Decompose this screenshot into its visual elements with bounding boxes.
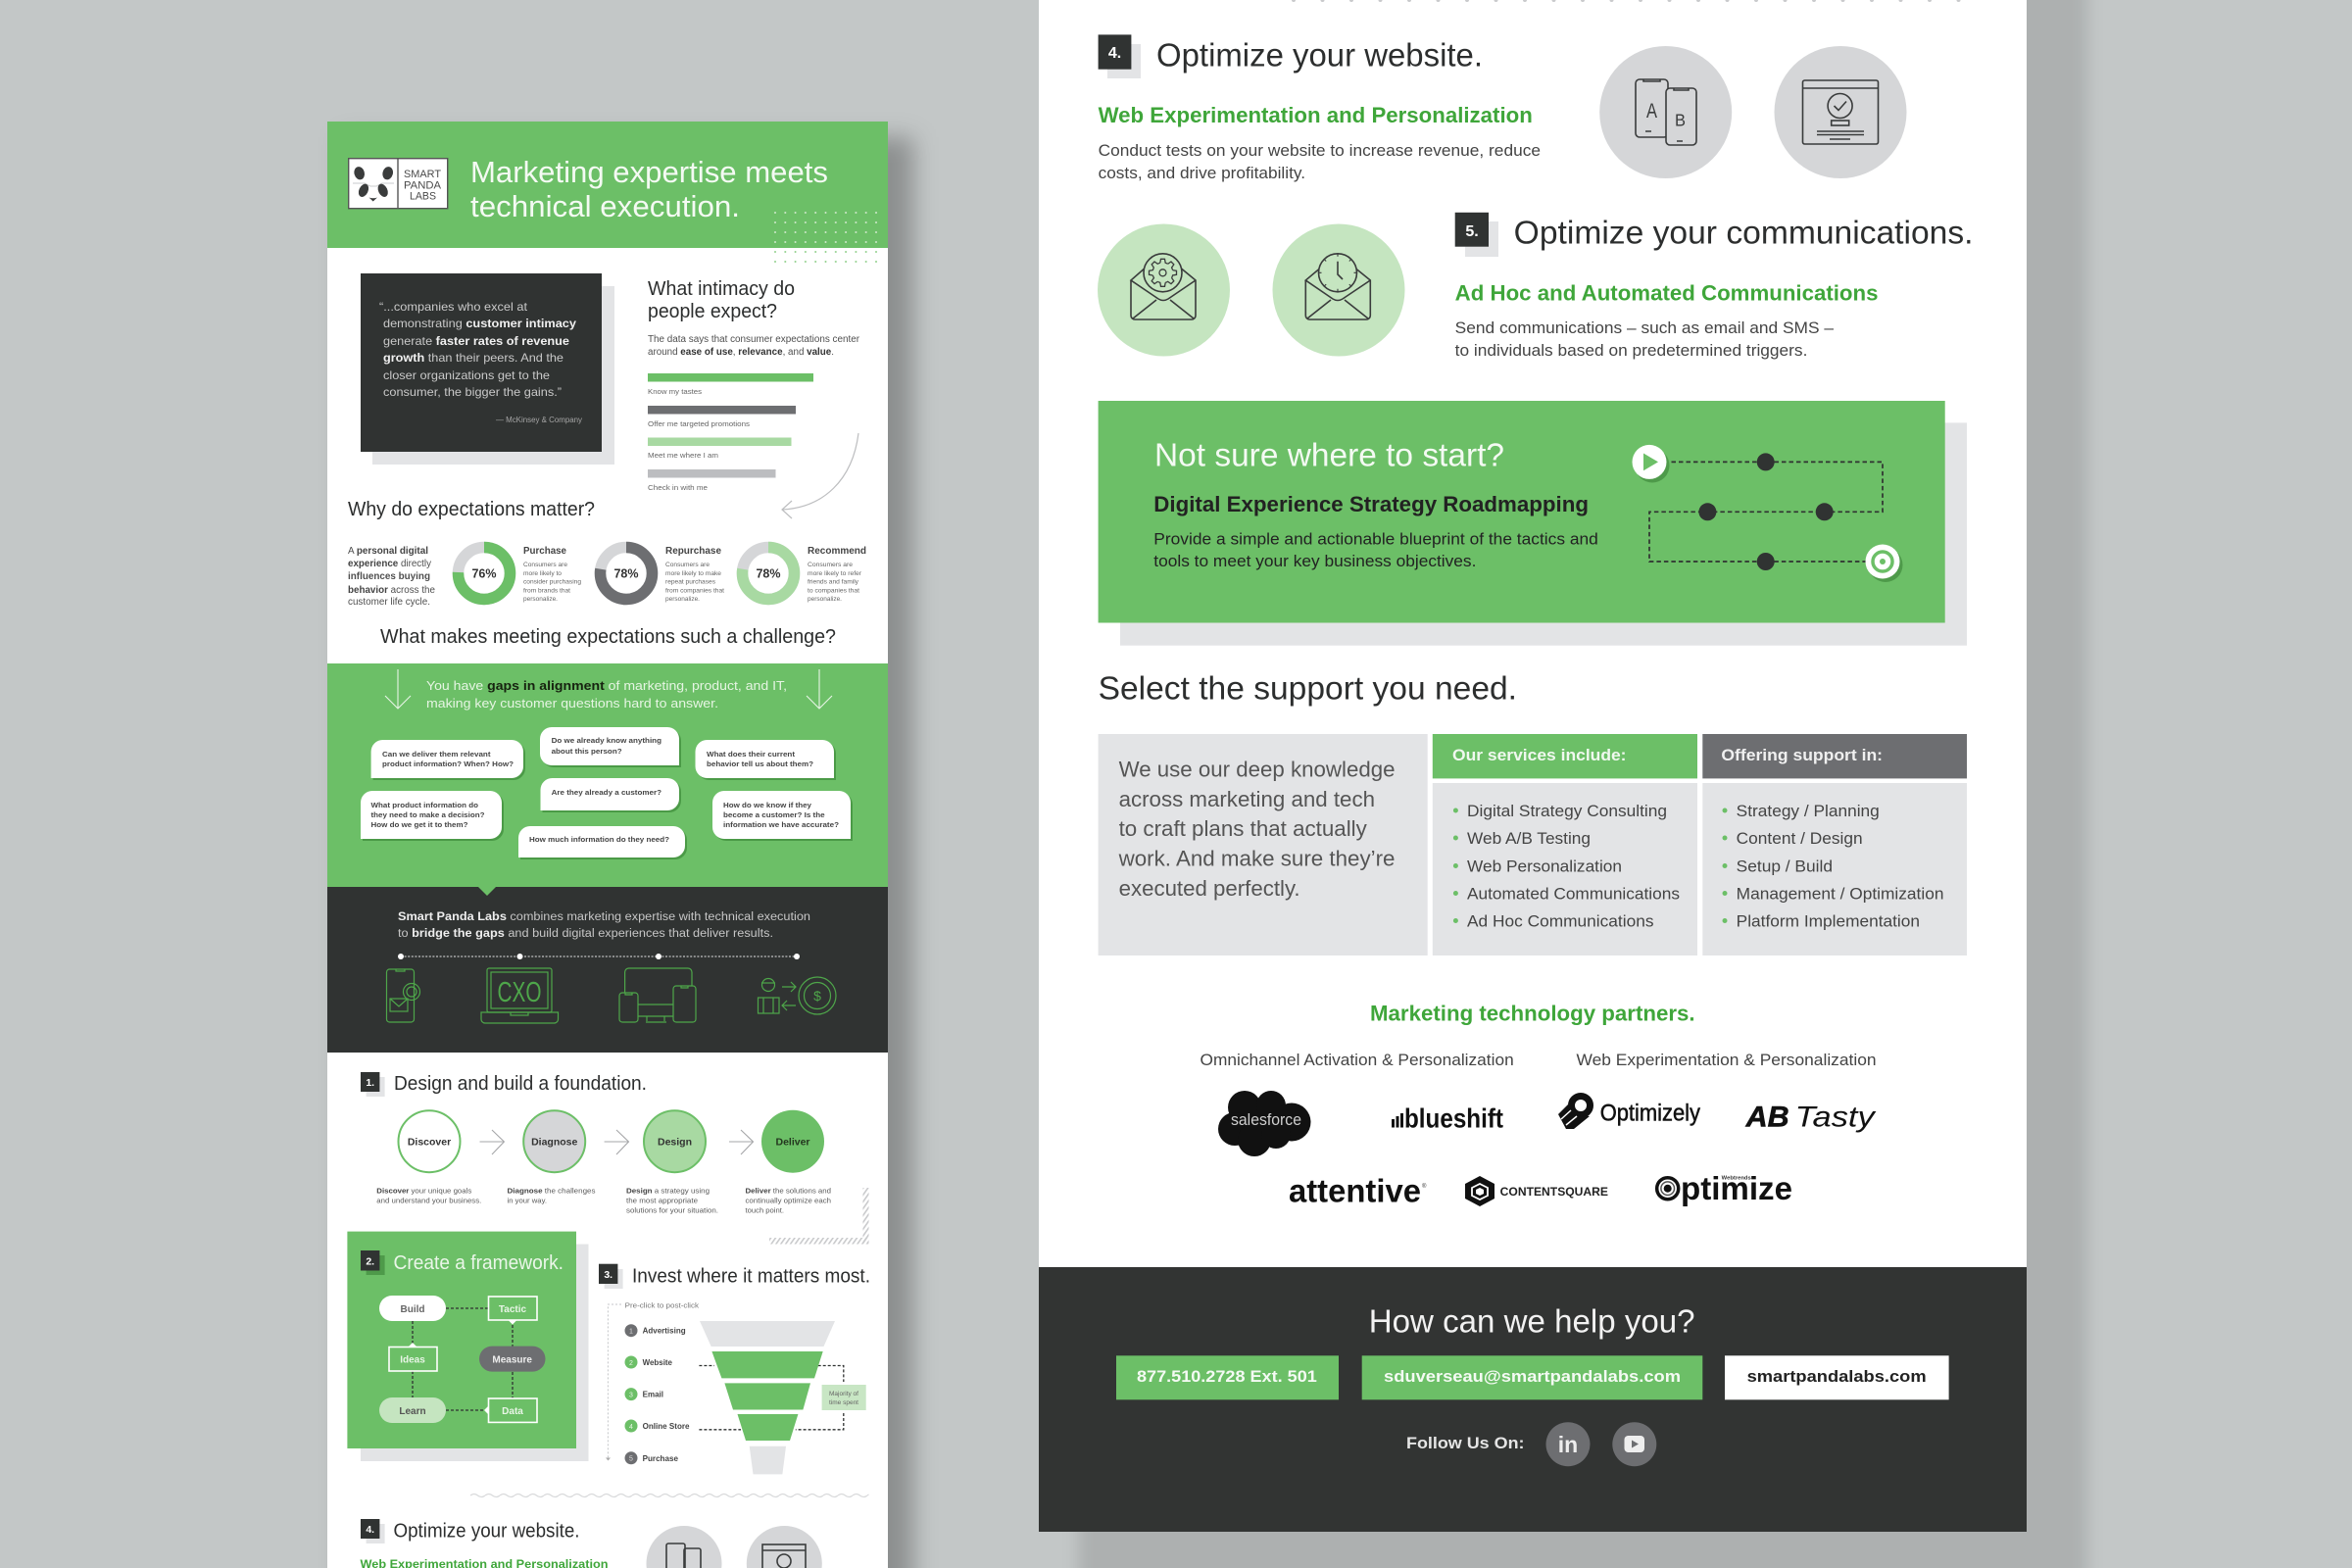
bridge text: to bridge the gaps and build digital experiences that deliver results. [398,928,773,940]
callout heading: Not sure where to start? [1154,437,1504,473]
pre-click label [606,1300,699,1460]
step: diagnose [523,1110,585,1172]
services panel: Web Personalization [1467,857,1622,875]
quote card: closer organizations get to the [383,368,550,382]
callout: majority of time spent: time spent [829,1399,858,1406]
gaps text: making key customer questions hard to answer. [426,696,718,710]
description: to individuals based on predetermined triggers. [1455,341,1807,360]
question bubbles: information we have accurate? [723,820,839,829]
bridge text [398,911,810,940]
logo: PANDA [404,179,442,191]
number badge 3 [599,1264,623,1289]
services panel [1433,734,1697,956]
footer heading: How can we help you? [1369,1302,1695,1339]
number badge 4 [1099,34,1141,78]
icon: linkedin [1546,1422,1590,1466]
donut: repurchase [600,546,724,603]
step: diagnose: Diagnose [531,1137,577,1149]
donut: purchase: personalize. [523,596,558,603]
framework connectors [413,1308,513,1410]
logo: optimize: ptimize [1681,1170,1792,1206]
heading: why expectations: Why do expectations matter? [348,499,595,520]
heading: Select the support you need. [1099,669,1517,706]
logo: LABS [410,190,436,202]
icon: A/B phones [647,1526,721,1568]
step descriptions [376,1186,831,1215]
support panel: Offering support in: [1721,746,1883,764]
logo: salesforce: salesforce [1231,1110,1301,1129]
follow us: Follow Us On: [1406,1434,1525,1452]
funnel legend: 3 [629,1392,633,1398]
footer [1039,1267,2027,1532]
text: personal digital experience: customer life cycle. [348,597,430,608]
logo: attentive: attentive [1289,1172,1421,1209]
support panel: Content / Design [1737,829,1863,848]
title: technical execution. [470,189,740,223]
step: deliver: Deliver [775,1137,810,1149]
support panel [1702,734,1967,956]
question bubbles: Do we already know anything [552,736,662,745]
number badge 3: 3. [604,1269,612,1281]
intimacy intro: around ease of use, relevance, and value. [648,347,834,358]
step descriptions: Discover your unique goals [376,1186,472,1195]
funnel legend: Online Store [643,1421,690,1431]
gaps text [426,678,787,710]
text: personal digital experience [348,546,435,608]
heading: Optimize your communications. [1514,214,1974,250]
node: data: Data [502,1406,523,1417]
quote card: “...companies who excel at [379,300,528,314]
section 4: website [1099,34,1907,182]
funnel legend: Email [643,1390,663,1399]
logo: optimize: Webtrends [1722,1176,1751,1182]
partners heading: Marketing technology partners. [1370,1002,1695,1026]
icon: envelope gear [1098,223,1230,357]
text: personal digital experience: behavior across the [348,585,435,596]
donut: purchase: consider purchasing [523,578,581,586]
callout subheading: Digital Experience Strategy Roadmapping [1153,492,1589,516]
donut: repurchase: personalize. [665,596,700,603]
button: website [1725,1355,1949,1399]
quote card: demonstrating customer intimacy [383,317,576,330]
support panel: Setup / Build [1737,857,1833,875]
donut: purchase [459,546,581,603]
heading: challenge: What makes meeting expectations such a challenge? [380,626,836,648]
description: costs, and drive profitability. [1099,164,1305,182]
arrow 1 [480,1130,504,1154]
donut: repurchase: repeat purchases [665,578,716,586]
step: deliver [761,1110,824,1173]
quote card: consumer, the bigger the gains.” [383,385,562,399]
quote card: growth than their peers. And the [383,351,564,365]
logo: AB Tasty: Tasty [1795,1101,1877,1133]
logo: attentive: ® [1422,1183,1427,1190]
intro panel [1099,734,1428,956]
arrow 3 [729,1130,753,1154]
callout: majority of time spent [822,1385,866,1410]
donut: repurchase: from companies that [665,588,724,594]
quote card: — McKinsey & Company [496,416,582,424]
step descriptions: continually optimize each [745,1196,831,1205]
heading: what intimacy [648,278,795,322]
heading: what intimacy: What intimacy do [648,278,795,300]
bridge text: Smart Panda Labs combines marketing expertise with technical execution [398,911,810,923]
step: discover [398,1110,461,1172]
funnel legend: Purchase [643,1453,678,1463]
arrow: down right [807,669,832,709]
funnel chart [699,1321,844,1474]
donut: repurchase: more likely to make [665,570,721,577]
step descriptions: touch point. [745,1205,784,1215]
funnel legend: Advertising [643,1326,686,1336]
step descriptions: the most appropriate [626,1196,698,1205]
heading: Optimize your website. [1156,36,1483,73]
support panel: Management / Optimization [1737,884,1944,903]
funnel legend: 2 [629,1360,633,1367]
services panel: Automated Communications [1467,884,1680,903]
arrow: curved [782,433,858,518]
bar chart: Meet me where I am [648,451,718,460]
question bubbles: behavior tell us about them? [707,760,813,768]
header band [327,122,888,268]
shadow: left panel [343,137,913,1568]
icon: customer and dollar: $ [813,988,821,1004]
question bubbles: they need to make a decision? [370,810,485,819]
button: phone: 877.510.2728 Ext. 501 [1137,1367,1317,1386]
number badge 2 [361,1250,385,1275]
description: Send communications – such as email and SMS – [1455,318,1835,337]
logo: contentsquare [1465,1176,1608,1206]
icon: phone [386,969,419,1022]
heading 2: Create a framework. [394,1252,564,1274]
icon: A/B phones [1599,46,1732,178]
icon: envelope clock [1272,223,1405,357]
donut: recommend: 78% [756,566,781,580]
donut: recommend: personalize. [808,596,842,603]
description [1099,141,1541,182]
donut: recommend: Recommend [808,546,866,557]
panel: right poster [1039,0,2027,1532]
logo: SMART [404,169,441,180]
subheading: Ad Hoc and Automated Communications [1455,280,1878,305]
node: ideas [389,1347,437,1371]
number badge 2: 2. [366,1256,374,1268]
services panel: Web A/B Testing [1467,829,1591,848]
section 5: communications [1098,213,1974,360]
heading 3: Invest where it matters most. [632,1265,870,1287]
donut: recommend: more likely to refer [808,570,862,577]
description [1455,318,1835,360]
intimacy intro [648,334,860,358]
heading: what intimacy: people expect? [648,301,777,322]
timeline [398,954,800,959]
shadow: right panel [1078,0,2087,1568]
logo: salesforce [1218,1091,1311,1156]
intro panel: executed perfectly. [1119,876,1300,901]
funnel legend: 5 [629,1456,633,1463]
section 4 preview [361,1519,822,1568]
icon: A/B phones: A [1646,100,1657,122]
donut: repurchase: Repurchase [665,546,721,557]
logo: optimizely: Optimizely [1600,1100,1700,1127]
question bubbles: How do we know if they [723,801,812,809]
icon: linkedin: in [1558,1432,1578,1457]
node: ideas: Ideas [400,1354,425,1366]
panel: left poster [327,122,888,1568]
number badge 5: 5. [1465,223,1479,240]
donut: repurchase: 78% [613,566,639,580]
support panel: Strategy / Planning [1737,802,1880,820]
icon: customer and dollar [759,977,836,1014]
icon: laptop CXO [481,968,559,1023]
intimacy intro: The data says that consumer expectations center [648,334,860,345]
logo: blueshift: blueshift [1404,1103,1503,1133]
step descriptions: solutions for your situation. [626,1205,718,1215]
icon: browser check [1774,46,1907,178]
number badge 1 [361,1072,385,1097]
callout description: Provide a simple and actionable blueprint of the tactics and [1153,530,1598,549]
logo: AB Tasty [1745,1101,1877,1133]
services panel: Ad Hoc Communications [1467,911,1654,931]
icon: youtube [1612,1422,1656,1466]
callout description: tools to meet your key business objectives. [1153,552,1476,570]
section: partners [1200,1002,1877,1209]
question bubbles: What product information do [370,801,478,809]
node: tactic [488,1297,537,1320]
node: data [488,1398,537,1422]
question bubbles: How do we get it to them? [370,820,468,829]
step descriptions: Design a strategy using [626,1186,710,1195]
text: personal digital experience: influences buying [348,571,430,582]
node: learn [379,1397,446,1423]
donut: purchase: more likely to [523,570,562,577]
question bubbles [361,727,853,859]
node: measure [479,1347,545,1372]
category labels: Web Experimentation & Personalization [1576,1051,1877,1069]
icon: browser [747,1526,822,1568]
heading 4: Optimize your website. [394,1521,580,1543]
category labels: Omnichannel Activation & Personalization [1200,1051,1514,1069]
text: personal digital experience: experience directly [348,559,431,569]
title [470,155,828,223]
section 1: foundation [361,1072,868,1245]
callout description [1153,530,1598,570]
callout: majority of time spent: Majority of [829,1391,858,1397]
band: bridge the gaps [327,887,888,1053]
section: select the support [1099,669,1967,956]
step descriptions: and understand your business. [376,1196,481,1205]
category labels [1200,1051,1877,1069]
question bubbles: about this person? [552,747,622,756]
section 3: invest [599,1264,870,1474]
quote card: generate faster rates of revenue [383,334,569,348]
node: learn: Learn [399,1406,426,1417]
support panel: Platform Implementation [1737,911,1920,931]
donut: recommend: Consumers are [808,562,853,568]
donut: recommend [743,546,866,603]
intro panel: to craft plans that actually [1119,816,1367,841]
donut: repurchase: Consumers are [665,562,710,568]
intro panel: across marketing and tech [1119,787,1375,811]
icon: devices [619,968,696,1022]
pre-click label: Pre-click to post-click [625,1300,699,1309]
question bubbles: Can we deliver them relevant [382,750,491,759]
logo: optimizely [1558,1096,1700,1129]
logo: contentsquare: CONTENTSQUARE [1500,1185,1608,1199]
button: email [1362,1355,1702,1399]
step: design [644,1110,706,1172]
quote card [361,273,614,465]
number badge 4: 4. [366,1524,374,1536]
number badge 1: 1. [366,1077,374,1089]
number badge 4 [361,1519,385,1544]
step descriptions: Diagnose the challenges [508,1186,596,1195]
node: tactic: Tactic [499,1304,527,1315]
donut: purchase: from brands that [523,588,570,594]
services panel: Digital Strategy Consulting [1467,802,1667,820]
step descriptions: Deliver the solutions and [745,1186,831,1195]
node: measure: Measure [492,1354,532,1366]
logo: AB Tasty: AB [1745,1101,1789,1133]
arrow 2 [605,1130,629,1154]
section 2: framework [347,1232,588,1461]
step: design: Design [658,1137,692,1149]
step: discover: Discover [408,1137,451,1149]
number badge 4: 4. [1108,45,1121,62]
arrow: down left [385,669,411,709]
funnel legend: 1 [629,1329,633,1335]
question bubbles: product information? When? How? [382,760,514,768]
bar chart: Check in with me [648,483,708,492]
intro panel: We use our deep knowledge [1119,757,1396,782]
logo [349,158,448,209]
number badge 5 [1455,213,1498,257]
question bubbles: Are they already a customer? [552,788,662,797]
node: build [379,1296,446,1321]
heading 1: Design and build a foundation. [394,1073,647,1095]
services panel: Our services include: [1452,746,1627,764]
bar chart: Offer me targeted promotions [648,419,750,428]
step descriptions: in your way. [508,1196,547,1205]
description: Conduct tests on your website to increase revenue, reduce [1099,141,1541,160]
node: build: Build [400,1304,425,1315]
text: personal digital experience: A personal digital [348,546,428,557]
donut: recommend: to companies that [808,588,859,594]
funnel legend: Website [643,1357,672,1367]
donut: recommend: friends and family [808,578,859,586]
subheading: Web Experimentation and Personalization [1099,103,1533,127]
callout panel: roadmapping [1099,401,1967,646]
donut: purchase: Purchase [523,546,566,557]
button: website: smartpandalabs.com [1747,1367,1927,1386]
roadmap diagram [1633,445,1903,582]
donut: purchase: 76% [471,566,497,580]
funnel legend: 4 [629,1424,633,1431]
band: gaps in alignment [327,663,888,887]
icon: laptop CXO: CXO [498,977,541,1008]
button: email: sduverseau@smartpandalabs.com [1384,1367,1681,1386]
intro panel: work. And make sure they’re [1118,846,1396,870]
question bubbles: What does their current [707,750,796,759]
bar chart: Know my tastes [648,387,702,396]
funnel legend [625,1324,690,1464]
donut: purchase: Consumers are [523,562,567,568]
title: Marketing expertise meets [470,155,828,189]
button: phone [1116,1355,1339,1399]
question bubbles: become a customer? Is the [723,810,825,819]
icon: A/B phones: B [1675,110,1686,129]
bar chart [648,373,813,492]
gaps text: You have gaps in alignment of marketing, product, and IT, [426,678,787,693]
question bubbles: How much information do they need? [529,835,669,844]
